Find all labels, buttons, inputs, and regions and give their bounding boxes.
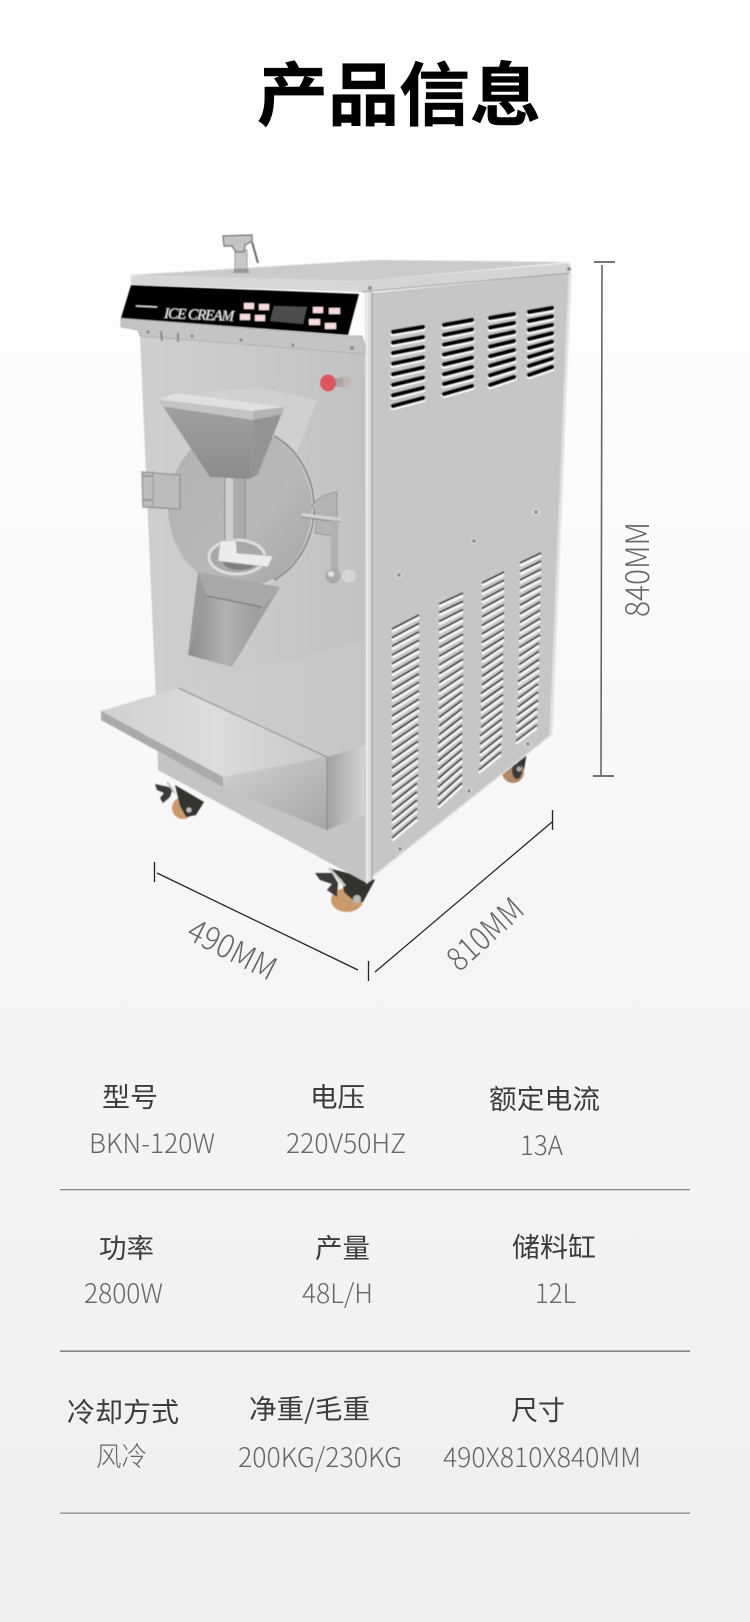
- row 2: 储料缸: [512, 1226, 596, 1265]
- row 1: BKN-120W: [89, 1122, 215, 1161]
- panel label: ICE CREAM: [163, 306, 236, 325]
- row 2 divider: [60, 1350, 690, 1352]
- side panel: [372, 273, 570, 877]
- upper vents: [393, 308, 552, 407]
- row 1: 额定电流: [489, 1078, 600, 1117]
- row 1: 13A: [520, 1124, 563, 1163]
- panel buttons: [240, 303, 340, 329]
- row 3: 490X810X840MM: [443, 1436, 641, 1475]
- side screws: [397, 510, 538, 851]
- door handle: [302, 492, 356, 584]
- rear caster: [502, 752, 527, 783]
- door paddle: [209, 540, 273, 574]
- control panel: [121, 285, 359, 335]
- row 1: [89, 1076, 600, 1163]
- lower vents: [392, 553, 541, 841]
- dimension: depth: [375, 810, 552, 980]
- product illustration: ice cream machine: [101, 235, 571, 912]
- row 1: 型号: [102, 1076, 158, 1115]
- row 2: 12L: [535, 1272, 576, 1311]
- row 1 divider: [60, 1189, 690, 1190]
- hopper reflection: [200, 388, 317, 474]
- left hinge: [142, 471, 180, 509]
- row 2: 功率: [99, 1227, 154, 1266]
- top plate: [131, 260, 571, 292]
- shelf: [101, 688, 327, 830]
- row 1: 电压: [310, 1076, 365, 1115]
- strip below control panel: [121, 318, 365, 354]
- row 3: 200KG/230KG: [238, 1436, 402, 1475]
- right front caster: [315, 868, 375, 912]
- corner pillar: [365, 292, 372, 884]
- panel display: [270, 306, 307, 324]
- hopper: [159, 393, 284, 479]
- row 3 divider: [60, 1512, 690, 1514]
- row 3: 净重/毛重: [249, 1388, 370, 1427]
- dimension: height: [593, 262, 659, 776]
- row 3: 尺寸: [511, 1389, 565, 1428]
- title: 产品信息: [257, 40, 541, 140]
- row 1: 220V50HZ: [286, 1122, 406, 1161]
- door shaft: [225, 478, 245, 540]
- label: 810MM: 810MM: [435, 886, 533, 980]
- row 2: 2800W: [84, 1272, 163, 1311]
- label: 490MM: 490MM: [180, 906, 286, 990]
- label: 840MM: 840MM: [613, 522, 659, 617]
- faucet: [223, 235, 258, 273]
- row 3: 风冷: [96, 1435, 147, 1474]
- spec table: [60, 1076, 690, 1514]
- row 2: 产量: [315, 1227, 370, 1266]
- machine front face: [140, 336, 367, 883]
- row 3: [67, 1388, 641, 1475]
- left front caster: [155, 782, 204, 819]
- dimension: width: [154, 862, 368, 990]
- row 2: 48L/H: [302, 1272, 373, 1311]
- door: [168, 427, 316, 589]
- row 3: 冷却方式: [67, 1391, 179, 1430]
- row 2: [84, 1226, 596, 1311]
- emergency stop button: [320, 374, 351, 392]
- chute: [188, 572, 280, 667]
